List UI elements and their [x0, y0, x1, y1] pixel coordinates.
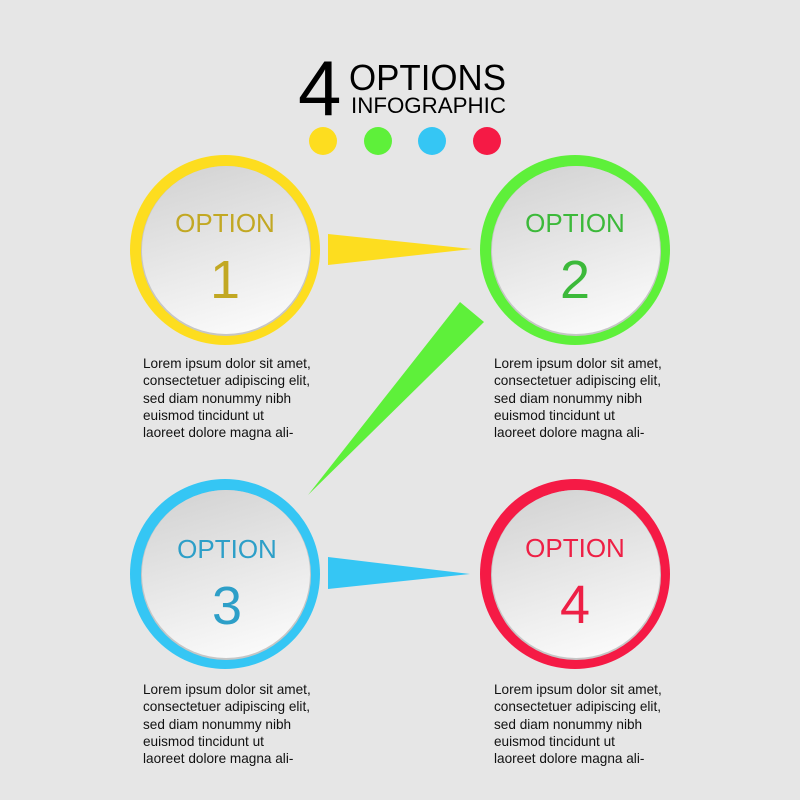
text 4: consectetuer adipiscing elit,	[494, 699, 661, 714]
title: 4	[298, 44, 341, 132]
title	[298, 44, 506, 132]
text 2: Lorem ipsum dolor sit amet,	[494, 356, 662, 371]
color dots	[309, 127, 501, 155]
text 2	[494, 356, 662, 440]
arrow: 2 to 3	[308, 302, 484, 495]
text 3: sed diam nonummy nibh	[143, 717, 291, 732]
text 2: laoreet dolore magna ali-	[494, 425, 644, 440]
option 1 circle: 1	[210, 250, 240, 310]
option 1 circle: OPTION	[175, 208, 275, 238]
arrow: 3 to 4	[328, 557, 470, 589]
text 3: Lorem ipsum dolor sit amet,	[143, 682, 311, 697]
text 1: consectetuer adipiscing elit,	[143, 373, 310, 388]
text 3: laoreet dolore magna ali-	[143, 751, 293, 766]
text 1: Lorem ipsum dolor sit amet,	[143, 356, 311, 371]
text 4: laoreet dolore magna ali-	[494, 751, 644, 766]
text 1: laoreet dolore magna ali-	[143, 425, 293, 440]
arrow: 1 to 2	[328, 234, 472, 265]
option 4 circle: OPTION	[525, 533, 625, 563]
option 1 circle	[130, 155, 320, 345]
option 2 circle	[480, 155, 670, 345]
option 4 circle	[480, 479, 670, 669]
title: OPTIONS	[349, 57, 506, 98]
option 3 circle: OPTION	[177, 534, 277, 564]
text 3: euismod tincidunt ut	[143, 734, 264, 749]
text 4	[494, 682, 662, 766]
text 1: euismod tincidunt ut	[143, 408, 264, 423]
text 1: sed diam nonummy nibh	[143, 391, 291, 406]
option 2 circle: 2	[560, 250, 590, 310]
title: INFOGRAPHIC	[351, 93, 506, 118]
text 1	[143, 356, 311, 440]
text 4: sed diam nonummy nibh	[494, 717, 642, 732]
text 3	[143, 682, 311, 766]
text 2: euismod tincidunt ut	[494, 408, 615, 423]
text 2: sed diam nonummy nibh	[494, 391, 642, 406]
text 2: consectetuer adipiscing elit,	[494, 373, 661, 388]
option 2 circle: OPTION	[525, 208, 625, 238]
text 3: consectetuer adipiscing elit,	[143, 699, 310, 714]
option 4 circle: 4	[560, 575, 590, 635]
option 3 circle	[130, 479, 320, 669]
option 3 circle: 3	[212, 576, 242, 636]
text 4: euismod tincidunt ut	[494, 734, 615, 749]
text 4: Lorem ipsum dolor sit amet,	[494, 682, 662, 697]
